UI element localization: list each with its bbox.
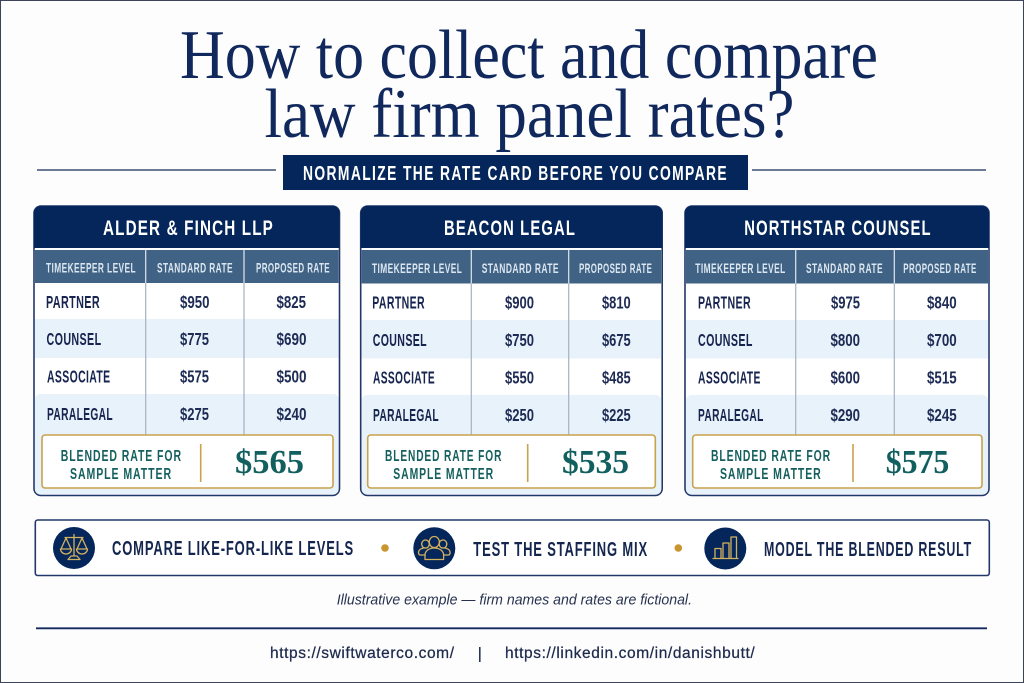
panel header xyxy=(34,206,340,248)
disclaimer note: Illustrative example — firm names and rates are fictional. xyxy=(337,592,692,608)
rate rows: $840 xyxy=(927,293,957,313)
rate rows: $800 xyxy=(830,330,860,350)
footer links: https://swiftwaterco.com/ xyxy=(270,645,455,662)
rate rows: $600 xyxy=(830,367,860,387)
rate rows: $690 xyxy=(276,329,307,349)
rate rows: $225 xyxy=(602,405,631,425)
rate rows: $550 xyxy=(505,367,534,387)
rate rows: $810 xyxy=(602,293,631,313)
rate rows: PARALEGAL xyxy=(47,404,113,424)
rate rows: PARTNER xyxy=(698,293,751,313)
blended rate callout: BLENDED RATE FOR xyxy=(61,448,182,465)
panel header: ALDER & FINCH LLP xyxy=(103,217,274,240)
rate rows: $900 xyxy=(505,293,534,313)
icon: scales xyxy=(53,527,95,569)
column headers: TIMEKEEPER LEVEL xyxy=(695,260,786,276)
rate rows: PARALEGAL xyxy=(373,405,439,425)
column headers: STANDARD RATE xyxy=(157,260,233,276)
title xyxy=(180,17,878,153)
panel: Northstar Counsel xyxy=(685,206,989,496)
title: law firm panel rates? xyxy=(264,76,794,153)
blended rate callout: $575 xyxy=(886,444,949,481)
rate rows: $775 xyxy=(180,329,209,349)
rate rows: COUNSEL xyxy=(46,329,102,349)
panel header xyxy=(685,206,989,248)
separator dot xyxy=(674,544,682,552)
panel header: BEACON LEGAL xyxy=(444,217,576,240)
blended rate callout: $535 xyxy=(562,444,629,481)
rate rows xyxy=(46,292,307,424)
rate rows: PARTNER xyxy=(46,292,100,312)
blended rate callout: BLENDED RATE FOR xyxy=(711,448,831,465)
rate rows: $245 xyxy=(927,405,957,425)
column headers: STANDARD RATE xyxy=(806,260,883,276)
column headers xyxy=(35,250,338,283)
panel: Alder & Finch LLP xyxy=(34,206,340,496)
panel header: NORTHSTAR COUNSEL xyxy=(744,217,932,240)
column headers xyxy=(362,250,661,284)
rate rows: $240 xyxy=(276,404,307,424)
rate rows: $290 xyxy=(830,405,860,425)
column headers: TIMEKEEPER LEVEL xyxy=(372,260,462,276)
rate rows: $485 xyxy=(602,367,631,387)
panel: Beacon Legal xyxy=(361,206,662,496)
rate rows: $275 xyxy=(180,404,209,424)
text: compare levels: COMPARE LIKE-FOR-LIKE LEVELS xyxy=(112,538,354,560)
rate rows: $950 xyxy=(180,292,210,312)
footer links: https://linkedin.com/in/danishbutt/ xyxy=(505,645,755,662)
title: How to collect and compare xyxy=(180,17,878,94)
column headers: PROPOSED RATE xyxy=(579,260,652,276)
rate rows xyxy=(698,293,957,425)
rate rows: ASSOCIATE xyxy=(373,367,435,387)
rate rows: COUNSEL xyxy=(698,330,753,350)
text: staffing mix: TEST THE STAFFING MIX xyxy=(473,539,648,561)
subtitle banner xyxy=(283,155,748,190)
column headers: STANDARD RATE xyxy=(482,260,559,276)
rate rows: $700 xyxy=(927,330,957,350)
rate rows: $515 xyxy=(927,367,957,387)
rate rows: $250 xyxy=(505,405,534,425)
rate rows: PARALEGAL xyxy=(698,405,764,425)
blended rate callout: SAMPLE MATTER xyxy=(720,466,822,483)
column headers: PROPOSED RATE xyxy=(256,260,330,276)
panel: takeaways bar xyxy=(35,520,989,576)
icon: bar chart xyxy=(704,528,746,570)
column headers: TIMEKEEPER LEVEL xyxy=(46,260,136,276)
subtitle banner: NORMALIZE THE RATE CARD BEFORE YOU COMPARE xyxy=(303,163,728,185)
blended rate callout xyxy=(693,435,982,488)
blended rate callout: BLENDED RATE FOR xyxy=(385,448,502,465)
blended rate callout: $565 xyxy=(235,444,304,481)
blended rate callout: SAMPLE MATTER xyxy=(393,466,494,483)
column headers xyxy=(686,250,988,284)
footer links xyxy=(270,645,755,662)
icon: people xyxy=(413,527,455,569)
rate rows: ASSOCIATE xyxy=(47,366,110,386)
rate rows: $575 xyxy=(180,366,209,386)
rate rows xyxy=(372,293,631,425)
blended rate callout xyxy=(42,435,333,488)
separator dot xyxy=(381,544,389,552)
panel header xyxy=(361,206,662,248)
blended rate callout: SAMPLE MATTER xyxy=(70,466,172,483)
blended rate callout xyxy=(368,435,655,488)
rate rows: ASSOCIATE xyxy=(698,367,761,387)
rate rows: $975 xyxy=(831,293,860,313)
rate rows: $675 xyxy=(602,330,631,350)
rate rows: COUNSEL xyxy=(373,330,427,350)
rate rows: $500 xyxy=(276,366,307,386)
rate rows: $750 xyxy=(505,330,534,350)
rate rows: PARTNER xyxy=(372,293,425,313)
rate rows: $825 xyxy=(276,292,306,312)
